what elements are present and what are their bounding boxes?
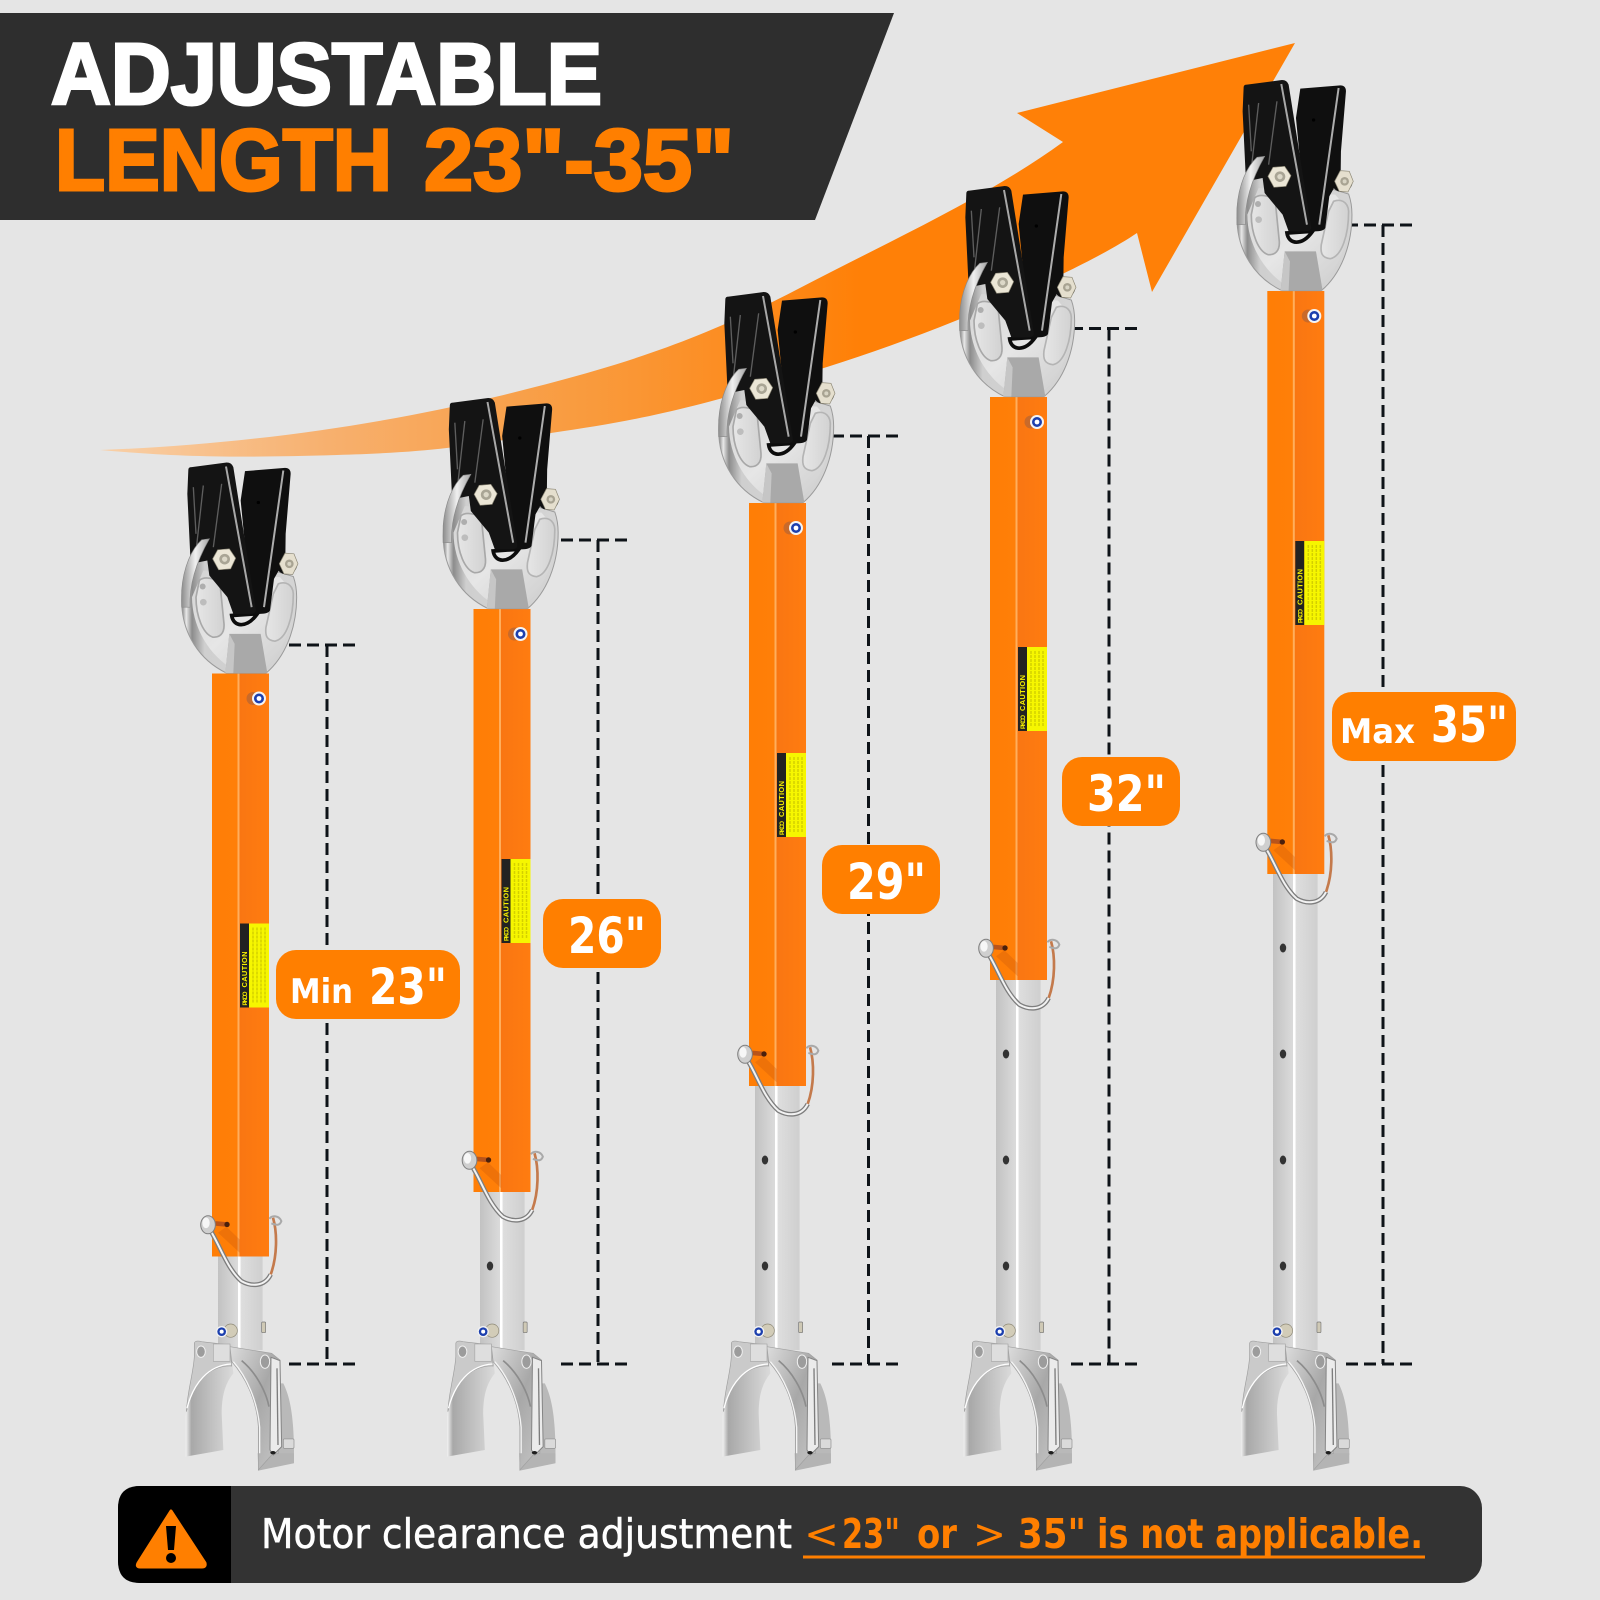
badge: Max 35: 35" [1431,696,1508,754]
warning emphasis text: 23" [842,1510,900,1558]
strut at 23 inches [182,462,298,1471]
warning emphasis text: is not applicable. [1097,1510,1423,1558]
title line: LENGTH 23"-35": LENGTH [55,112,392,209]
badge: Min 23 [276,950,460,1019]
strut at 29 inches [719,292,835,1471]
strut at 26 inches [443,398,559,1471]
dimension line: 32 inch [1071,328,1138,1364]
arrow: rising orange swoosh [100,43,1295,457]
badge: 32: 32" [1087,765,1166,823]
warning underline [803,1556,1425,1558]
badge: Max 35: Max [1340,712,1415,752]
warning emphasis text: < [804,1510,839,1558]
badge: Min 23: Min [290,972,353,1012]
badge: 29: 29" [847,853,926,911]
warning emphasis text: 35" [1018,1510,1086,1558]
warning emphasis text: > [973,1510,1006,1558]
warning text: Motor clearance adjustment [261,1510,792,1558]
warning emphasis text: or [917,1510,958,1558]
icon: warning triangle [137,1511,205,1567]
badge: 32 [1062,757,1180,826]
title line: LENGTH 23"-35": 23"-35" [424,112,734,209]
strut at 35 inches [1237,80,1353,1471]
dimension line: 29 inch [832,436,898,1364]
warning bar [118,1486,1482,1583]
title banner [0,13,894,220]
badge: Min 23: 23" [369,958,447,1016]
dimension line: 23 inch [289,645,355,1364]
badge: 29 [822,845,940,914]
strut at 32 inches [960,186,1076,1471]
title line: LENGTH 23"-35" [55,112,734,209]
badge: Max 35 [1332,692,1516,761]
badge: 26: 26" [568,907,646,965]
dimension line: 35 inch [1346,225,1412,1364]
title line: ADJUSTABLE: ADJUSTABLE [51,26,602,123]
warning emphasis text [804,1510,1423,1558]
dimension line: 26 inch [561,540,627,1364]
badge: 26 [543,899,661,968]
